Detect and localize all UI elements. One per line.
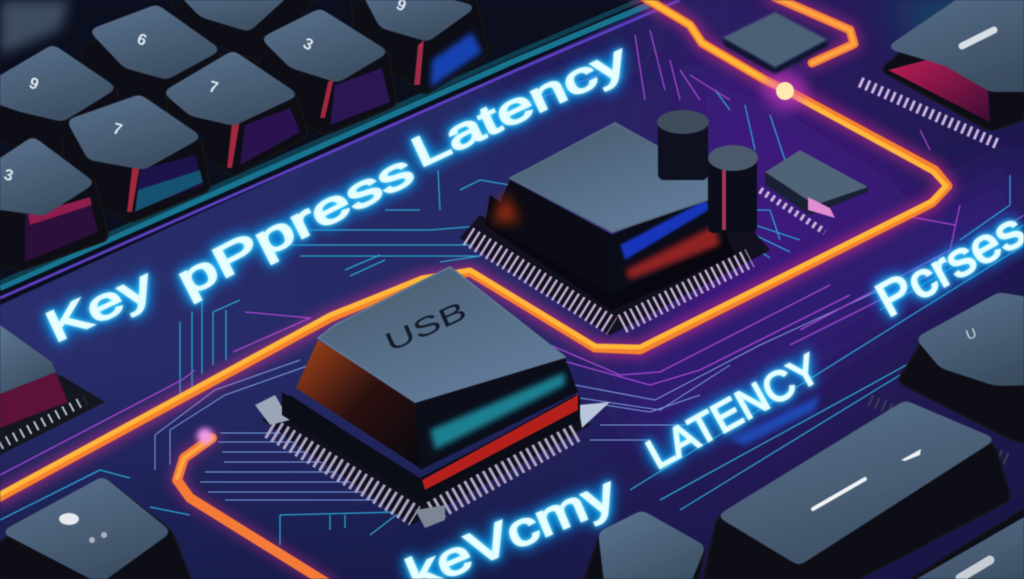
keycap row [0,0,490,272]
deck edge teal band [0,0,680,298]
orange trace: upper branch [770,0,854,63]
key: 9 left [0,44,124,156]
heading text: Key pPpress Latency: pPpress [169,145,421,306]
key: bottom middle [576,510,706,579]
key: right [870,290,1024,460]
key: 6 [80,4,232,126]
key: bottom wide [698,400,1012,579]
capacitors [657,110,758,233]
key: 3 upper: 3 [300,35,316,54]
label text: Pcrses: Pcrses [868,204,1024,328]
key: 9 left: 9 [27,75,41,94]
traces near small chips [510,30,1010,258]
key: left middle [0,325,105,455]
usb label: USB [380,295,471,357]
key: 3 upper [256,8,398,136]
key: 3 lower: 3 [2,166,15,185]
fan lines below usb [0,360,400,545]
heading text: Key pPpress Latency: Latency [404,36,634,176]
key: bottom left [0,476,200,579]
key: top right [860,0,1024,145]
key: 7 upper [162,50,310,178]
heading text: Key pPpress Latency: Key [39,260,161,352]
key: top right blue [350,0,490,96]
chip: center [460,123,770,335]
latency blue glow [730,395,820,445]
key: top [160,0,330,66]
label text: keVcmy LATENCY: LATENCY [639,345,828,478]
key legend: U [964,324,979,343]
deck corner highlight [0,0,70,55]
traces right of usb [550,205,1024,510]
orange trace: main route [0,0,948,497]
key: 7 lower: 7 [111,120,124,139]
small chip right [760,150,868,232]
key: bottom right [875,495,1024,579]
key symbol: dash [962,30,994,46]
key: 7 lower [60,94,212,224]
key: 6: 6 [135,31,149,50]
small chip top center [722,12,828,74]
orange trace: lower route [177,438,330,579]
keyboard deck dark region [0,0,665,305]
label text: keVcmy LATENCY [399,345,828,579]
key: 3 lower [0,136,110,272]
heading text: Key pPpress Latency [39,36,634,352]
chip: USB [255,267,610,528]
purple glow regions [480,0,1024,440]
spark node [197,68,807,444]
key: 7 upper: 7 [207,78,220,97]
